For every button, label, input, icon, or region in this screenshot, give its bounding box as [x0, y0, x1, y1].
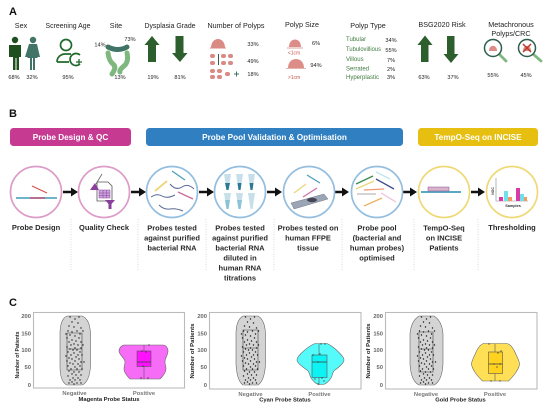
chart: Cyan probe status: 50 — [201, 365, 207, 371]
values: Metachronous — [487, 73, 532, 79]
chart: Cyan probe status: 100 — [197, 348, 207, 354]
header: Probe Design & QC: Probe Design & QC — [33, 133, 108, 142]
step: diluted in human RNA titrations: Probes tested — [215, 224, 265, 232]
step: probe pool optimised: (bacterial and — [353, 234, 402, 242]
step: probes tested on human FFPE tissue — [278, 166, 339, 252]
chart: Cyan probe status: 150 — [197, 332, 207, 338]
step: diluted in human RNA titrations: human RNA — [219, 264, 262, 272]
chart: Magenta probe status — [15, 312, 184, 403]
icon: male and female figures — [9, 37, 40, 70]
step: TempO-Seq on INCISE patients: on INCISE — [426, 234, 462, 242]
heading: Sex: Sex — [15, 21, 28, 30]
chart: Gold probe status: Positive — [484, 392, 507, 398]
chart: Gold probe status: Negative — [414, 392, 439, 398]
step: Quality Check — [78, 166, 130, 232]
step: diluted in human RNA titrations — [212, 166, 268, 282]
list: polyp types: 55% — [385, 48, 397, 54]
values: Site — [94, 37, 136, 81]
heading: BSG2020 Risk: BSG2020 Risk — [418, 20, 466, 29]
step: probe pool optimised: Probe pool — [357, 224, 397, 232]
values: Number of Polyps: 33% — [247, 42, 259, 48]
list: polyp types: Hyperplastic — [346, 75, 379, 81]
chart: Cyan probe status: Positive — [308, 392, 331, 398]
values: Polyp Size: 94% — [310, 63, 322, 69]
chart: Cyan probe status: 200 — [197, 314, 207, 320]
chart: Magenta probe status: Magenta Probe Status — [79, 397, 139, 403]
icon: risk arrows — [418, 36, 458, 63]
step: probes tested on human FFPE tissue: Probes tested on — [278, 224, 339, 232]
chart: Gold probe status: 0 — [380, 383, 383, 389]
values: Number of Polyps — [247, 42, 259, 78]
icon: polyp counts — [210, 39, 239, 79]
header: TempO-Seq on INCISE — [418, 128, 538, 146]
chart: Gold probe status: Gold Probe Status — [435, 398, 486, 404]
values: Sex: 32% — [26, 75, 38, 81]
step: diluted in human RNA titrations: against purified — [212, 234, 268, 242]
chart: Magenta probe status: 200 — [21, 314, 31, 320]
values: Site: 73% — [124, 37, 136, 43]
step: TempO-Seq on INCISE patients: TempO-Seq — [423, 224, 465, 232]
heading: Metachronous Polyps/CRC: Polyps/CRC — [491, 29, 531, 38]
step: probe pool optimised — [350, 166, 405, 262]
step: probes tested against bacterial RNA: against purified — [144, 234, 200, 242]
chart: Cyan probe status: Negative — [238, 392, 263, 398]
heading: Dysplasia Grade: Dysplasia Grade — [144, 21, 196, 30]
icon: polyps under and over 1cm — [286, 40, 306, 81]
step: probes tested against bacterial RNA: bacterial RNA — [147, 244, 197, 252]
chart: Cyan probe status: 0 — [204, 383, 207, 389]
list: polyp types: 7% — [387, 58, 395, 64]
list: polyp types — [346, 37, 397, 81]
step: TempO-Seq on INCISE patients — [418, 166, 470, 252]
panel A: cohort characteristics — [8, 6, 541, 81]
header: Probe Design & QC — [10, 128, 131, 146]
icon: polyps under and over 1cm: <1cm — [288, 50, 300, 56]
step: probes tested against bacterial RNA — [144, 166, 200, 252]
icon: polyps under and over 1cm: >1cm — [288, 75, 300, 81]
panel B: workflow — [9, 108, 538, 282]
list: polyp types: 2% — [387, 67, 395, 73]
values: Sex: 68% — [8, 75, 20, 81]
list: polyp types: Villous — [346, 57, 364, 63]
heading: Polyp Size: Polyp Size — [285, 20, 319, 29]
chart: Gold probe status: 50 — [377, 365, 383, 371]
values: BSG2020 Risk: 37% — [447, 75, 459, 81]
chart: Magenta probe status: 0 — [28, 383, 31, 389]
panel label B: B — [9, 108, 17, 120]
step: TempO-Seq on INCISE patients: Patients — [429, 244, 459, 252]
step: Thresholding: NGC — [491, 187, 495, 195]
header: Probe Pool Validation & Optimisation — [146, 128, 403, 146]
panel C: violin plots — [9, 297, 537, 404]
icon: colon — [108, 47, 128, 74]
values: Dysplasia Grade: 81% — [174, 75, 186, 81]
list: polyp types: Serrated — [346, 66, 369, 72]
icon: magnifiers — [484, 40, 541, 61]
heading: Polyp Type: Polyp Type — [350, 21, 386, 30]
chart: Gold probe status: 150 — [373, 332, 383, 338]
step: Thresholding — [486, 166, 538, 232]
step: Thresholding: Thresholding — [488, 223, 536, 232]
values: Number of Polyps: 49% — [247, 59, 259, 65]
header: TempO-Seq on INCISE: TempO-Seq on INCISE — [434, 133, 522, 142]
step: Probe Design — [10, 166, 62, 232]
chart: Cyan probe status: Number of Patients — [190, 324, 196, 378]
chart: Magenta probe status: 100 — [21, 348, 31, 354]
chart: Gold probe status: 100 — [373, 348, 383, 354]
values: Site: 13% — [114, 75, 126, 81]
chart: Gold probe status — [366, 312, 537, 404]
panel label C: C — [9, 297, 17, 309]
chart: Cyan probe status: Cyan Probe Status — [259, 398, 311, 404]
step: Thresholding: Samples — [505, 204, 521, 208]
values: Dysplasia Grade — [147, 75, 186, 81]
step: probes tested on human FFPE tissue: tissue — [297, 244, 319, 252]
values: Dysplasia Grade: 19% — [147, 75, 159, 81]
step: Quality Check: Quality Check — [79, 223, 130, 232]
values: Number of Polyps: 18% — [247, 72, 259, 78]
step: probe pool optimised: human probes) — [350, 244, 405, 252]
icon: person aged 50 plus — [57, 40, 82, 66]
step: diluted in human RNA titrations: diluted in — [223, 254, 257, 262]
values: Polyp Size — [310, 41, 322, 69]
chart: Magenta probe status: Number of Patients — [15, 332, 21, 378]
step: probe pool optimised: optimised — [359, 254, 395, 262]
values: Metachronous: 45% — [520, 73, 532, 79]
heading: Metachronous Polyps/CRC — [488, 20, 534, 38]
step: Probe Design: Probe Design — [12, 223, 61, 232]
chart: Gold probe status: Number of Patients — [366, 324, 372, 378]
values: Site: 14% — [94, 42, 106, 48]
arrows between steps — [63, 188, 485, 196]
list: polyp types: 34% — [385, 38, 397, 44]
values: Metachronous: 55% — [487, 73, 499, 79]
chart: Magenta probe status: 50 — [25, 365, 31, 371]
chart: Magenta probe status: 150 — [21, 332, 31, 338]
list: polyp types: Tubulovillious — [346, 47, 381, 53]
heading: Metachronous Polyps/CRC: Metachronous — [488, 20, 534, 29]
chart: Magenta probe status: Negative — [62, 391, 87, 397]
list: polyp types: Tubular — [346, 37, 366, 43]
values: Polyp Size: 6% — [312, 41, 320, 47]
heading: Number of Polyps: Number of Polyps — [208, 21, 265, 30]
step: diluted in human RNA titrations: bacterial RNA — [215, 244, 265, 252]
step: probes tested against bacterial RNA: Probes tested — [147, 224, 197, 232]
icon: up and down arrows — [144, 36, 188, 62]
values: BSG2020 Risk — [418, 75, 459, 81]
values: BSG2020 Risk: 63% — [418, 75, 430, 81]
heading: Site: Site — [110, 21, 122, 30]
chart: Magenta probe status: Positive — [133, 391, 156, 397]
heading: Screening Age: Screening Age — [46, 21, 90, 30]
value: Screening Age: 95% — [62, 75, 74, 81]
list: polyp types: 3% — [387, 75, 395, 81]
values: Sex — [8, 75, 38, 81]
step: probes tested on human FFPE tissue: human FFPE — [285, 234, 331, 242]
step: diluted in human RNA titrations: titrations — [224, 274, 256, 282]
chart: Gold probe status: 200 — [373, 314, 383, 320]
chart: Cyan probe status — [190, 312, 361, 404]
panel label A: A — [9, 6, 17, 18]
header: Probe Pool Validation & Optimisation: Probe Pool Validation & Optimisation — [202, 133, 347, 142]
